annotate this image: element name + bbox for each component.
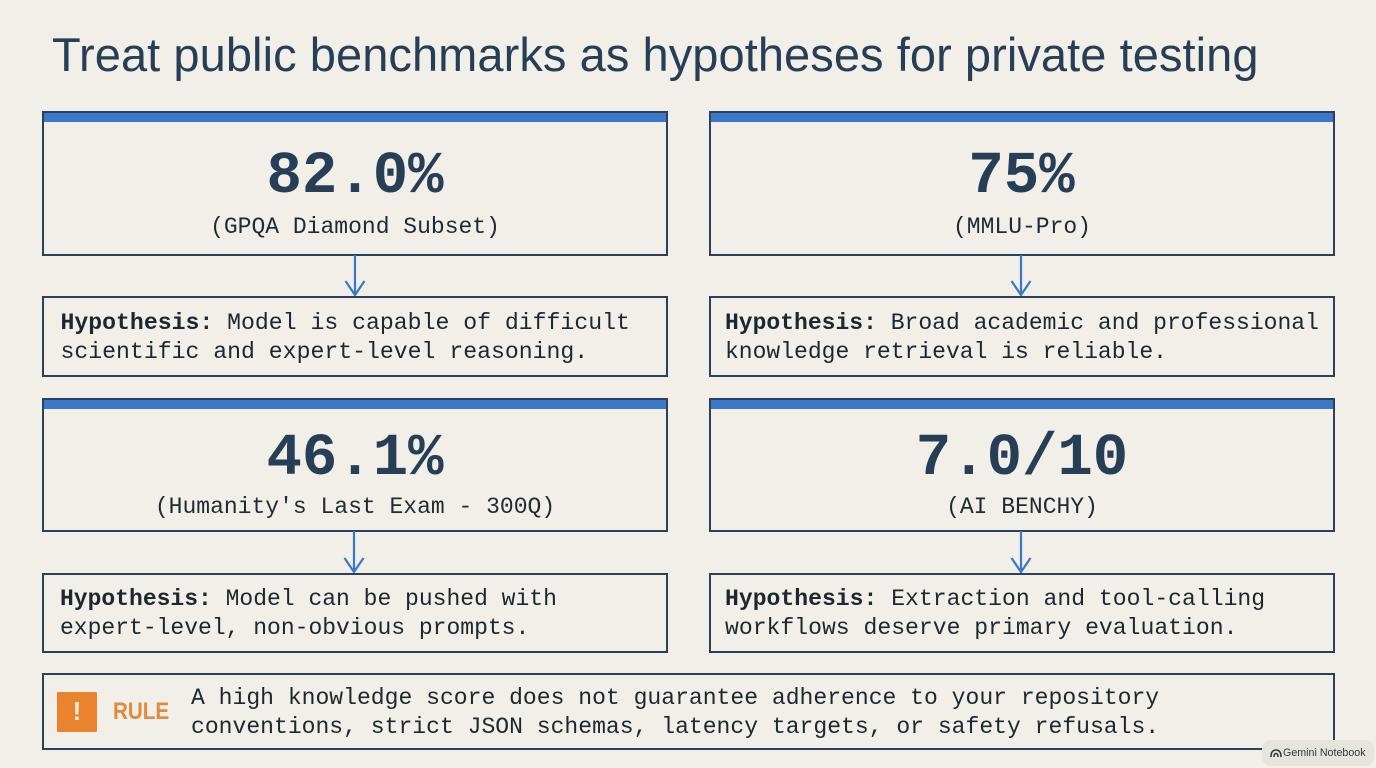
watermark: Gemini Notebook: Gemini Notebook [1283, 747, 1366, 759]
panel: GPQA hypothesis [42, 296, 668, 377]
watermark: Gemini Notebook [1262, 740, 1374, 766]
label: AI BENCHY: (AI BENCHY) [946, 494, 1098, 520]
panel: Humanity's Last Exam hypothesis [42, 573, 668, 653]
arrow: AI BENCHY to hypothesis [1010, 531, 1032, 573]
panel: MMLU-Pro hypothesis: Hypothesis: Broad academic and professional [725, 310, 1319, 336]
stat: 82.0%: 82.0% [266, 143, 444, 210]
icon: warning [57, 692, 97, 732]
rule text: conventions, strict JSON schemas, latency targets, or safety refusals. [191, 714, 1159, 740]
panel: Humanity's Last Exam hypothesis: expert-level, non-obvious prompts. [60, 614, 529, 640]
label: GPQA Diamond Subset: (GPQA Diamond Subset) [210, 214, 500, 240]
arrow: Humanity's Last Exam to hypothesis [344, 531, 364, 573]
label: MMLU-Pro: (MMLU-Pro) [953, 214, 1091, 240]
arrow: GPQA to hypothesis [344, 255, 366, 296]
panel: AI BENCHY hypothesis: workflows deserve primary evaluation. [725, 614, 1237, 640]
panel: AI BENCHY hypothesis [709, 573, 1335, 653]
panel: rule callout [42, 673, 1335, 750]
panel: Humanity's Last Exam benchmark [42, 398, 668, 532]
panel: Humanity's Last Exam hypothesis: Hypothesis: Model can be pushed with [60, 586, 557, 612]
stat: 75%: 75% [968, 143, 1075, 210]
label: RULE: RULE [113, 698, 169, 725]
stat: 7.0/10: 7.0/10 [916, 425, 1128, 492]
rule text: A high knowledge score does not guarantee adherence to your repository [191, 685, 1159, 711]
rule text [191, 685, 1159, 740]
panel: GPQA benchmark [42, 111, 668, 256]
stat: 46.1%: 46.1% [266, 425, 444, 492]
title: Treat public benchmarks as hypotheses for private testing [52, 28, 1259, 81]
label: Humanity's Last Exam: (Humanity's Last Exam - 300Q) [155, 494, 555, 520]
arrow: MMLU-Pro to hypothesis [1010, 255, 1032, 296]
panel: GPQA hypothesis: Hypothesis: Model is capable of difficult [60, 310, 630, 336]
icon: warning: ! [73, 696, 81, 726]
icon: Gemini Notebook logo [1270, 749, 1282, 757]
panel: MMLU-Pro hypothesis [709, 296, 1335, 377]
panel: MMLU-Pro benchmark [709, 111, 1335, 256]
panel: AI BENCHY benchmark [709, 398, 1335, 532]
panel: AI BENCHY hypothesis: Hypothesis: Extraction and tool-calling [725, 586, 1265, 612]
panel: GPQA hypothesis: scientific and expert-level reasoning. [60, 338, 588, 364]
panel: MMLU-Pro hypothesis: knowledge retrieval is reliable. [725, 338, 1167, 364]
